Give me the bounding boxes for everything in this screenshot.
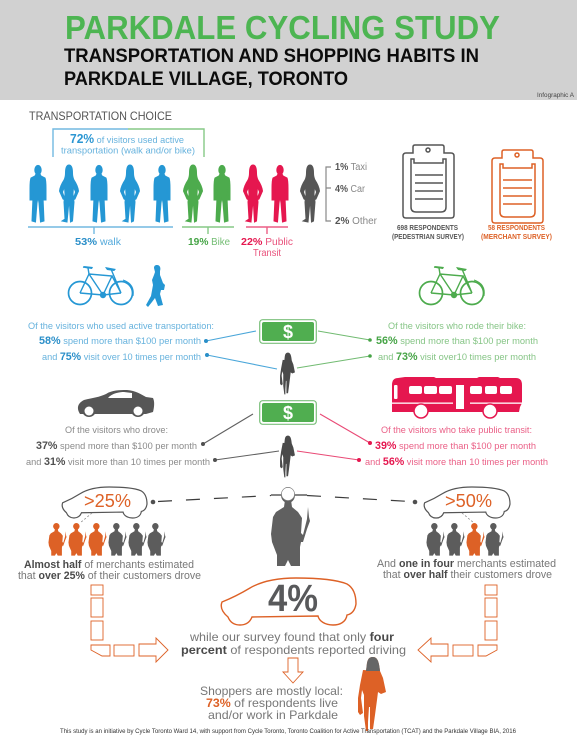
text: almost half — [18, 559, 201, 582]
icon: green bike — [420, 266, 484, 304]
callout: over 50 percent car — [424, 487, 510, 523]
text: shoppers mostly local: and/or work in Parkdale — [208, 708, 338, 722]
merchants: one in four — [426, 523, 504, 556]
icon: shopper bottom — [280, 436, 295, 477]
text: one in four: that over half their customers drove — [383, 569, 552, 581]
text: pedestrian respondents: (PEDESTRIAN SURVEY) — [392, 234, 464, 241]
subtitle: TRANSPORTATION AND SHOPPING HABITS IN — [64, 46, 479, 67]
text: active transportation stats: and 75% visit over 10 times per month — [42, 351, 201, 363]
text: survey finding: while our survey found that only four — [189, 630, 394, 644]
text: transit stats: and 56% visit more than 10 times per month — [365, 456, 548, 468]
people row — [30, 165, 320, 222]
arrow: left merchant path — [91, 585, 168, 662]
text: active transportation stats — [28, 321, 214, 363]
text: active transportation stats: 58% spend more than $100 per month — [39, 335, 201, 347]
text: bike stats: Of the visitors who rode their bike: — [388, 321, 526, 332]
label: taxi, car, other: 4% Car — [335, 184, 366, 195]
text: bike stats — [376, 321, 538, 363]
arrow: down — [283, 658, 303, 683]
label: public transit: 22% Public — [241, 236, 293, 248]
callout: over 50 percent car: >50% — [445, 491, 492, 511]
bracket: active transportation: transportation (walk and/or bike) — [61, 146, 195, 156]
merchants: almost half — [48, 523, 166, 556]
icon: shopper top — [280, 353, 295, 394]
label: taxi, car, other — [326, 162, 378, 227]
label: walk — [28, 227, 173, 248]
text: active transportation stats: Of the visitors who used active transportation: — [28, 321, 214, 332]
text: bike stats: 56% spend more than $100 per month — [376, 335, 538, 347]
connectors: transit — [297, 414, 372, 462]
text: almost half: that over 25% of their customers drove — [18, 570, 201, 582]
text: transit stats: Of the visitors who take public transit: — [381, 425, 532, 436]
subtitle: PARKDALE VILLAGE, TORONTO — [64, 69, 348, 90]
label: public transit: Transit — [253, 248, 281, 259]
arrow: right merchant path — [418, 585, 497, 662]
icon: merchant survey clipboard — [492, 150, 543, 223]
bracket: active transportation — [53, 129, 204, 157]
infographic tag: Infographic A — [537, 92, 575, 99]
text: merchant respondents: 58 RESPONDENTS — [488, 225, 545, 232]
text: pedestrian respondents: 698 RESPONDENTS — [397, 225, 458, 232]
text: shoppers mostly local: 73% of respondents live — [206, 696, 338, 710]
text: drove stats: 37% spend more than $100 per month — [36, 440, 197, 452]
text: survey finding: percent of respondents reported driving — [181, 643, 406, 657]
section heading: transportation choice: TRANSPORTATION CHOICE — [29, 109, 172, 123]
footer credit: This study is an initiative by Cycle Toronto Ward 14, with support from Cycle Toronto, Toronto Coalition for Active Transportation (TCAT) and the Parkdale Village BIA, 2016 — [60, 728, 516, 735]
connectors: active transportation — [204, 331, 277, 369]
label: walk: 53% walk — [75, 236, 122, 248]
icon: local shopper — [358, 657, 386, 731]
connectors: bike — [297, 331, 372, 368]
text: almost half: Almost half of merchants estimated — [24, 559, 194, 571]
dashed thought line — [151, 495, 417, 504]
car: four percent — [221, 578, 356, 625]
icon: dollar bill top — [260, 320, 316, 343]
icon: walking woman — [146, 265, 165, 307]
subtitle — [64, 46, 479, 90]
icon: dollar bill bottom: $ — [283, 403, 293, 423]
text: merchant respondents — [481, 225, 552, 241]
text: merchant respondents: (MERCHANT SURVEY) — [481, 234, 552, 241]
text: transit stats: 39% spend more than $100 per month — [375, 440, 536, 452]
text: drove stats — [26, 425, 210, 468]
icon: blue bike — [68, 266, 133, 304]
text: bike stats: and 73% visit over10 times per month — [378, 351, 536, 363]
icon: pedestrian survey clipboard — [403, 145, 454, 218]
label: taxi, car, other: 1% Taxi — [335, 162, 367, 173]
icon: merchant figure — [271, 487, 310, 566]
header band — [0, 0, 577, 100]
text: transit stats — [365, 425, 548, 468]
text: pedestrian respondents — [392, 225, 464, 241]
text: shoppers mostly local: Shoppers are mostly local: — [200, 684, 343, 698]
icon: red bus — [392, 377, 522, 418]
text: drove stats: Of the visitors who drove: — [65, 425, 168, 436]
text: one in four — [377, 558, 556, 581]
connectors: drove — [201, 414, 279, 462]
text: survey finding — [181, 630, 406, 657]
label: bike: 19% Bike — [188, 236, 230, 248]
label: bike — [182, 227, 234, 248]
text: one in four: And one in four merchants estimated — [377, 558, 556, 570]
icon: dollar bill bottom — [260, 401, 316, 424]
car: four percent: 4% — [268, 578, 318, 620]
icon: grey car — [78, 390, 154, 417]
label: taxi, car, other: 2% Other — [335, 216, 378, 227]
text: drove stats: and 31% visit more than 10 times per month — [26, 456, 210, 468]
bracket: active transportation: 72% of visitors used active — [70, 132, 184, 146]
callout: over 25 percent car: >25% — [84, 491, 131, 511]
callout: over 25 percent car — [62, 487, 147, 523]
text: shoppers mostly local — [200, 684, 343, 722]
title: PARKDALE CYCLING STUDY — [65, 9, 500, 46]
label: public transit — [241, 227, 293, 259]
icon: dollar bill top: $ — [283, 322, 293, 342]
